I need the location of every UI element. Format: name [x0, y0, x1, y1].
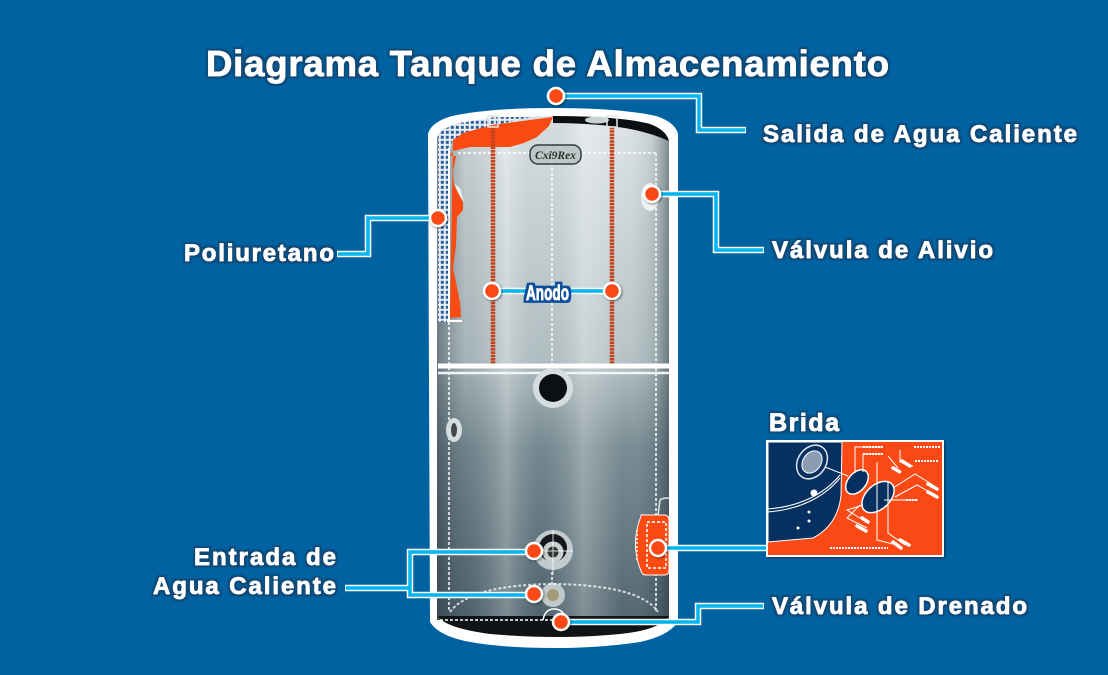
tank white outline [428, 108, 678, 648]
bolts [857, 461, 937, 548]
central port [533, 368, 573, 408]
panel background [767, 441, 943, 556]
connector: poliuretano [337, 218, 437, 254]
flange detail panel [767, 439, 943, 556]
horizontal mid band [438, 364, 669, 368]
tank holes [796, 490, 818, 530]
hot water inlet port [533, 530, 573, 575]
connector: salida [556, 96, 746, 130]
flange plate [856, 475, 900, 519]
CorroPlex logo badge: Cxi9Rex [535, 150, 576, 162]
label: entrada de: Entrada de [194, 544, 336, 571]
connector: anodo [492, 288, 612, 294]
connector: drenado [561, 606, 764, 622]
handle loop [658, 498, 669, 515]
anodo label: Anodo [526, 282, 569, 305]
small callout labels [830, 447, 940, 548]
orange flange cover [636, 515, 669, 575]
base dashed line [440, 619, 552, 621]
dashed tank outline details [449, 153, 656, 612]
marker dots [430, 88, 666, 630]
orange insulation [450, 117, 553, 318]
label: agua caliente: Agua Caliente [153, 573, 336, 600]
anode rod tops [488, 116, 617, 127]
left side port [446, 418, 462, 442]
black bottom cavity [438, 616, 669, 637]
black top cavity [553, 116, 669, 141]
water heater tank [428, 108, 678, 648]
lower port [541, 583, 565, 607]
title: Diagrama Tanque de Almacenamiento [206, 43, 889, 84]
upper right valve port [641, 183, 659, 211]
drain valve [543, 609, 566, 620]
gasket [841, 465, 873, 499]
flange ring [790, 439, 834, 485]
navy tank section [768, 442, 842, 542]
polyurethane foam strip [438, 117, 530, 322]
anode rods [493, 127, 612, 368]
connector: entrada [345, 552, 533, 595]
CorroPlex logo badge [530, 145, 581, 164]
white insulation edge [447, 148, 462, 321]
label: valvula de drenado: Válvula de Drenado [772, 593, 1027, 620]
connector: brida [658, 545, 768, 551]
label: brida: Brida [769, 409, 840, 437]
label: valvula de alivio: Válvula de Alivio [772, 237, 993, 264]
label: salida de agua caliente: Salida de Agua Caliente [763, 121, 1077, 148]
label: poliuretano: Poliuretano [184, 240, 334, 267]
metal body [437, 116, 669, 620]
callout lines [825, 447, 933, 545]
dashed base ellipse [450, 584, 658, 612]
connector: alivio [652, 194, 764, 250]
